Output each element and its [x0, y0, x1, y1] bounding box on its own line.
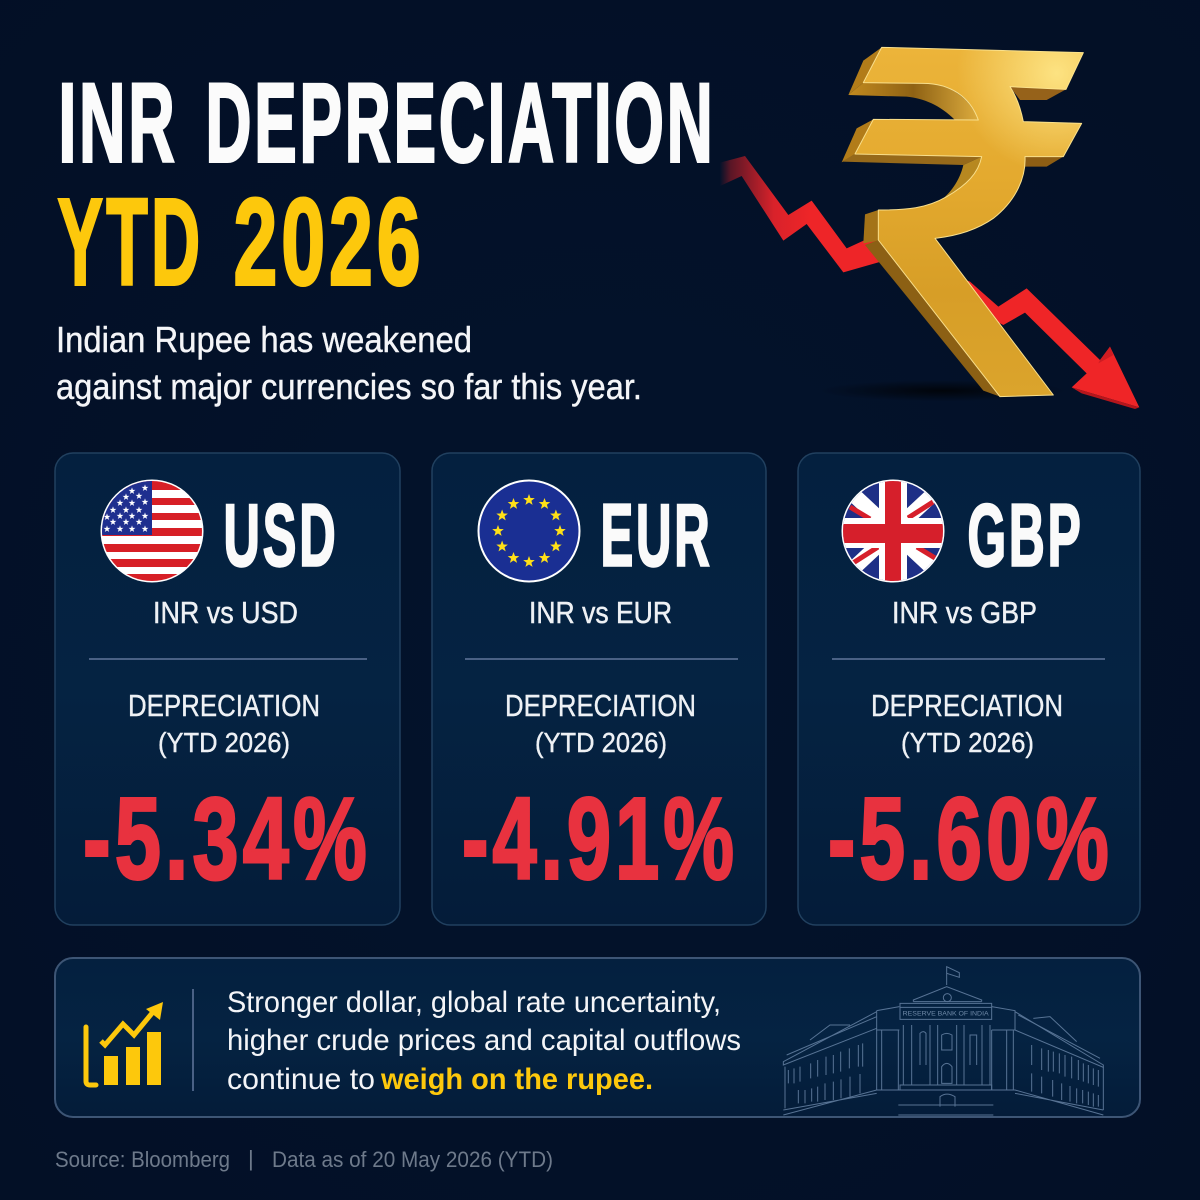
footer: source	[55, 1146, 553, 1172]
pair label: INR vs EUR	[529, 595, 672, 630]
depreciation label: DEPRECIATION	[128, 688, 320, 723]
footer: source: Data as of 20 May 2026 (YTD)	[272, 1147, 553, 1172]
icon: UK flag	[840, 478, 946, 584]
pair label: INR vs GBP	[892, 595, 1037, 630]
icon: rising bar chart	[86, 1002, 163, 1085]
red arrow	[720, 156, 887, 272]
commentary text: Stronger dollar, global rate uncertainty,	[227, 986, 721, 1019]
subtitle	[56, 319, 642, 407]
footer: source: Source: Bloomberg	[55, 1147, 230, 1172]
depreciation label: (YTD 2026)	[158, 727, 290, 758]
currency code: EUR	[600, 486, 712, 584]
panel: USD	[55, 453, 400, 925]
commentary text	[227, 986, 741, 1096]
subtitle: Indian Rupee has weakened	[56, 319, 472, 360]
depreciation label	[871, 688, 1063, 758]
panel: GBP	[798, 453, 1140, 925]
illustration: falling red arrow behind golden rupee symbol	[720, 47, 1139, 409]
currency code: GBP	[968, 486, 1084, 584]
rupee symbol extrusion	[842, 47, 1067, 397]
depreciation label: DEPRECIATION	[505, 688, 696, 723]
title: INR Depreciation	[58, 60, 716, 186]
title: INR Depreciation: DEPRECIATION	[206, 60, 716, 186]
rupee symbol face	[855, 47, 1083, 397]
value: -5.34%	[83, 774, 371, 904]
illustration: Reserve Bank of India line drawing	[783, 967, 1103, 1115]
currency code: USD	[224, 486, 338, 584]
depreciation label: (YTD 2026)	[901, 727, 1034, 758]
footer: source: |	[248, 1146, 254, 1171]
subtitle: against major currencies so far this year.	[56, 366, 642, 407]
depreciation label: DEPRECIATION	[871, 688, 1063, 723]
depreciation label	[128, 688, 320, 758]
pair label: INR vs USD	[153, 595, 298, 630]
title: YTD 2026: 2026	[234, 174, 424, 312]
value: -4.91%	[462, 774, 738, 904]
commentary text: weigh on the rupee.	[380, 1063, 653, 1096]
icon: EU flag	[478, 480, 580, 582]
title: YTD 2026: YTD	[58, 174, 204, 312]
icon: US flag	[100, 480, 204, 582]
ground shadow	[820, 380, 1067, 401]
commentary text: continue to	[227, 1063, 375, 1096]
depreciation label: (YTD 2026)	[535, 727, 667, 758]
illustration: Reserve Bank of India line drawing: RESERVE BANK OF INDIA	[903, 1011, 989, 1018]
commentary text: higher crude prices and capital outflows	[227, 1024, 741, 1057]
depreciation label	[505, 688, 696, 758]
panel: commentary	[55, 958, 1140, 1117]
panel: EUR	[432, 453, 766, 925]
title: INR Depreciation: INR	[58, 60, 178, 186]
